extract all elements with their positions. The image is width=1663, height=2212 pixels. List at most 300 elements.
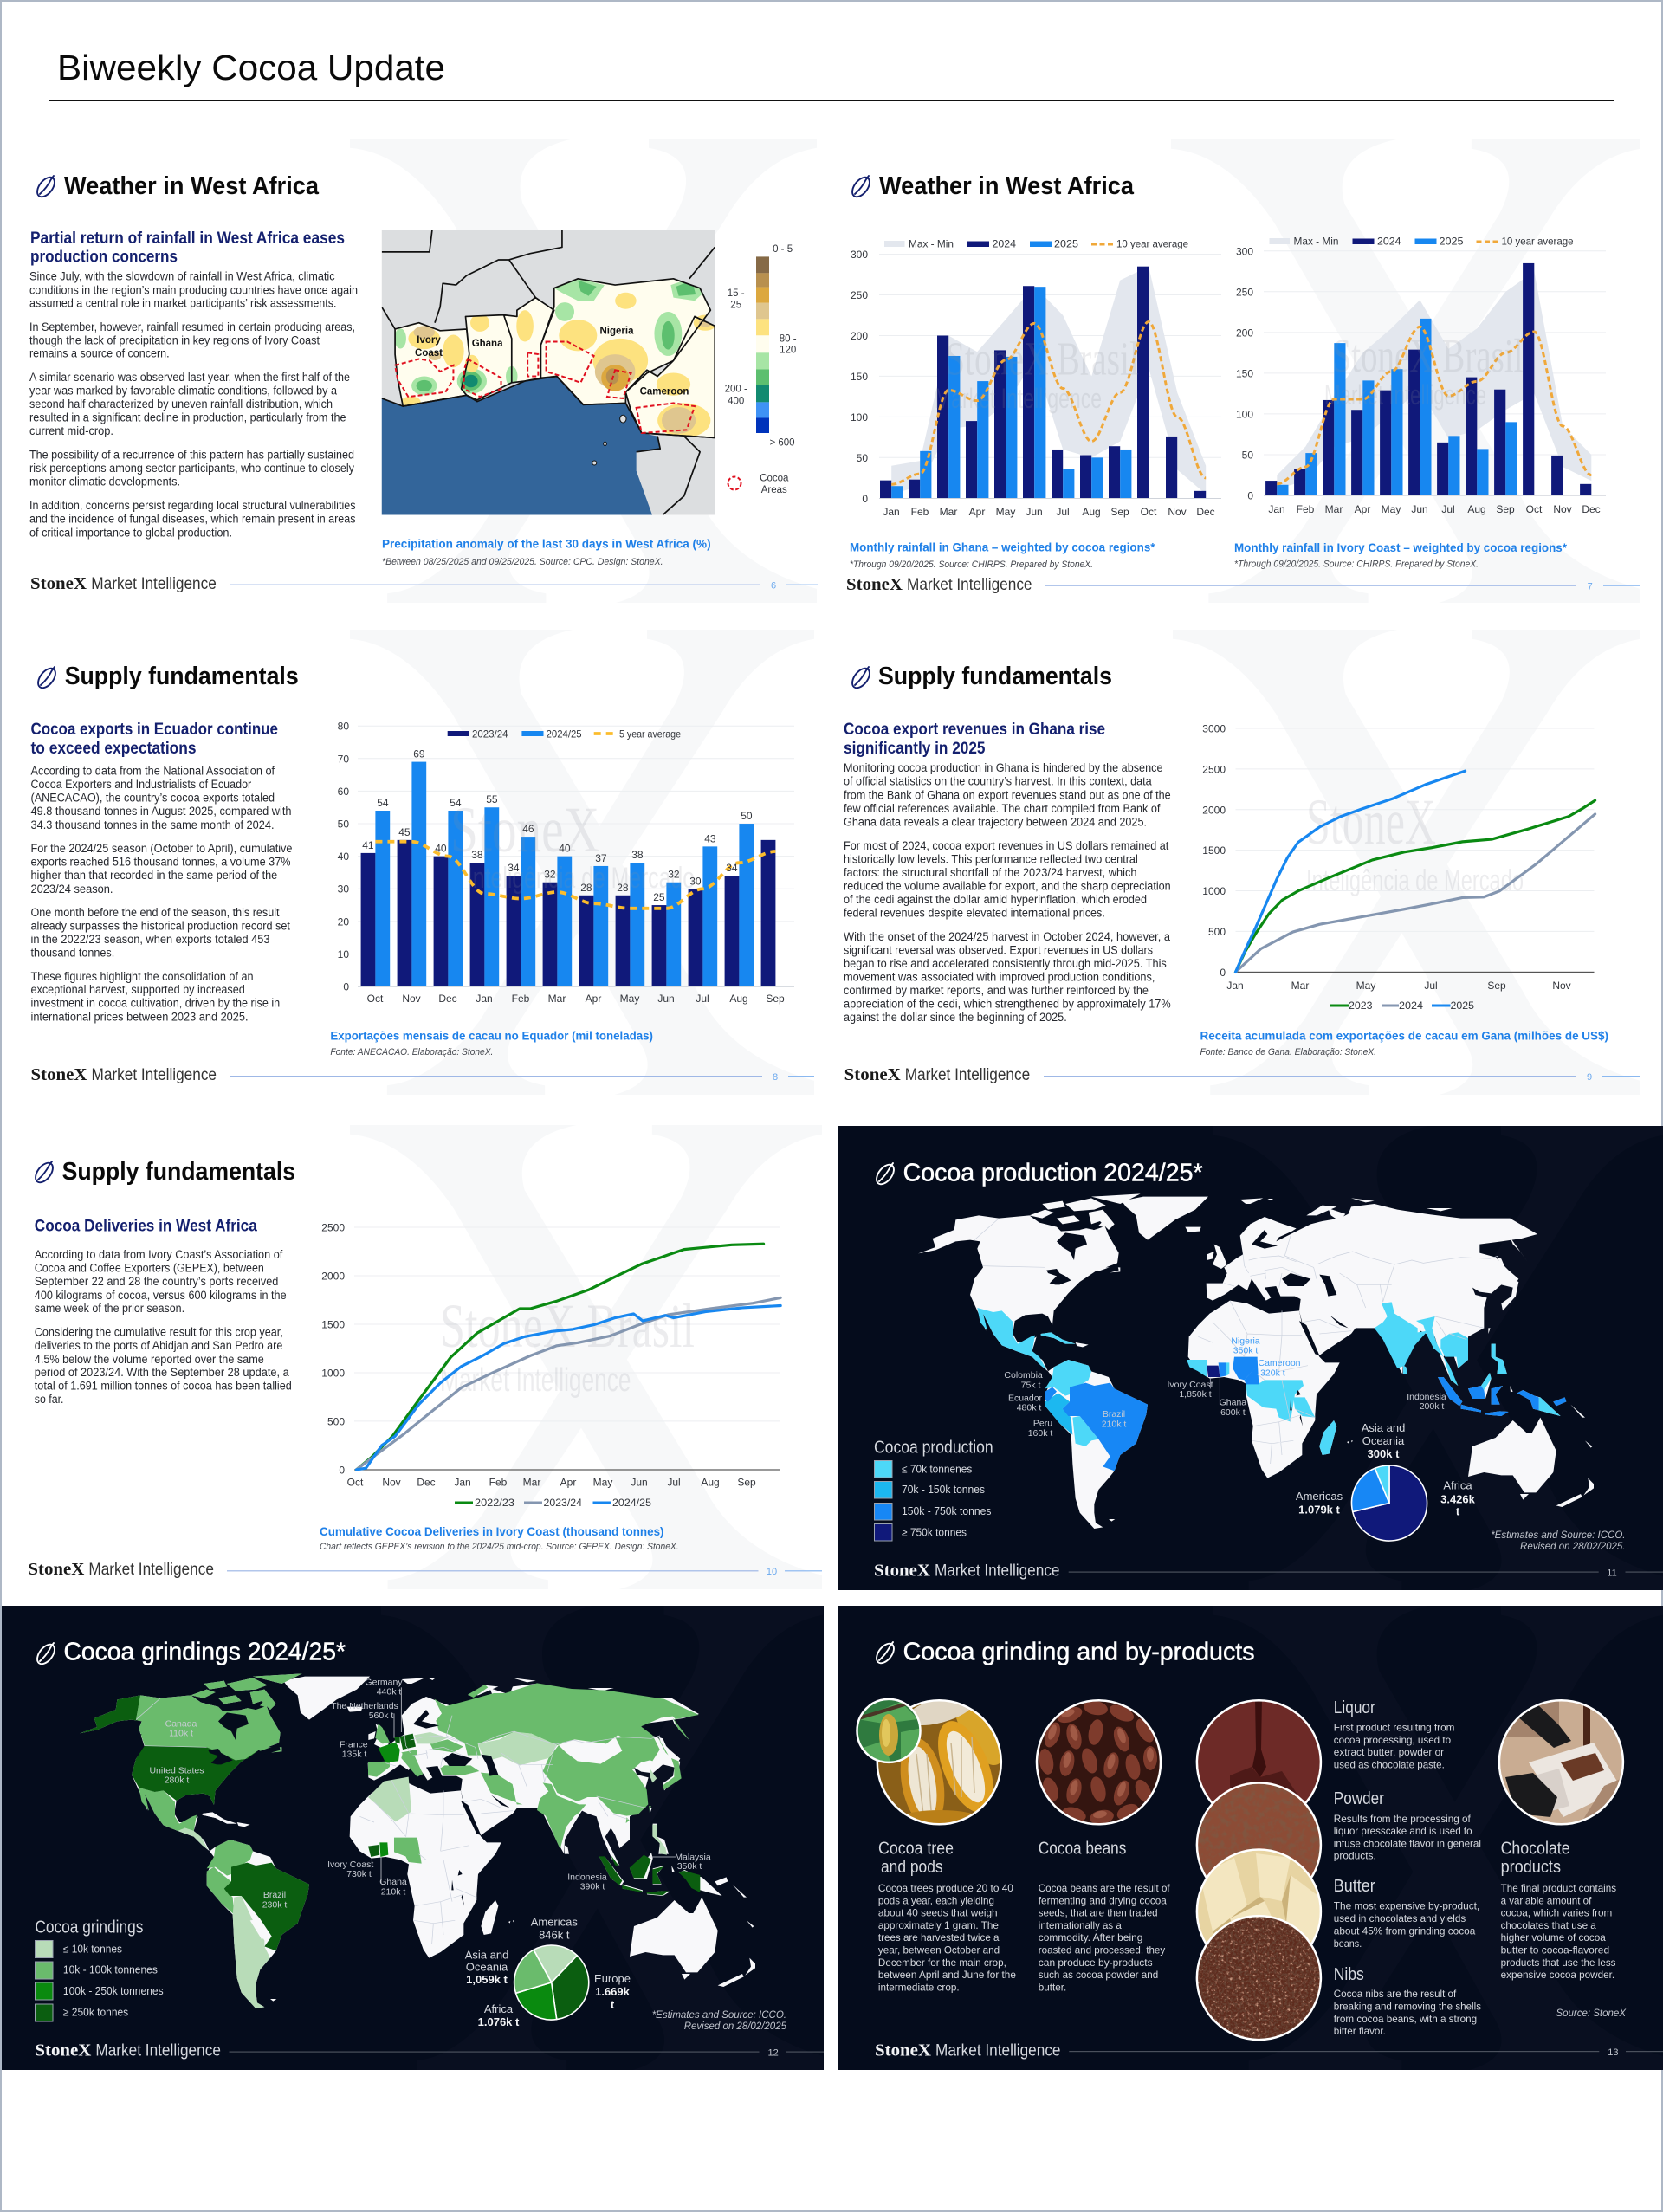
legend: production classes: 70k - 150k tonnes [902,1484,985,1496]
text block: cocoa beans: Cocoa beans [1039,1839,1126,1858]
bar chart: Ecuador monthly exports: Nov [402,993,421,1005]
text block: Ecuador commentary: investment in cocoa cultivation, driven by the rise in [31,997,280,1010]
text block: Ecuador commentary: (ANECACAO), the country’s cocoa exports totaled [31,792,275,804]
text block: Ecuador commentary: 2023/24 season. [31,883,113,896]
text block: liquor: First product resulting from [1334,1721,1454,1733]
line chart: Ghana cumulative export revenues: 2500 [1202,763,1226,775]
bar chart: Ivory Coast monthly rainfall: 150 [1236,367,1253,379]
line chart: cumulative deliveries: StoneX Brasil [440,1291,695,1361]
text block: Ecuador commentary: One month before the end of the season, this result [31,906,280,919]
bar chart: Ghana monthly rainfall: Dec [1196,506,1215,518]
text block: deliveries commentary: deliveries to the ports of Abidjan and San Pedro are [35,1339,282,1352]
legend: precipitation scale: Areas [761,485,787,495]
bar chart: Ivory Coast monthly rainfall [1236,236,1606,515]
bar chart: Ivory Coast monthly rainfall: Market Intelligence [1324,379,1486,411]
legend: precipitation scale [725,244,797,495]
legend [884,237,1188,249]
country labels: 280k t [165,1775,189,1786]
text block: cocoa beans: seeds, that are then traded [1039,1907,1158,1919]
heading: supply fundamentals: Supply fundamentals [62,1158,295,1186]
text block: cocoa beans: such as cocoa powder and [1039,1969,1158,1981]
text block: Ecuador commentary: Cocoa Exporters and Industrialists of Ecuador [31,778,252,791]
bar chart: Ghana monthly rainfall: 300 [851,249,868,261]
footer: brand and page number: StoneX [31,1065,87,1084]
bar chart: Ghana monthly rainfall: Jul [1056,506,1070,518]
text block: Ghana commentary: began to rise and accelerated consistently through mid-2025. This [844,957,1167,970]
bar chart: Ecuador monthly exports: Oct [367,993,384,1005]
legend: grinding classes: 100k - 250k tonnenes [63,1985,164,1997]
text block: cocoa beans [1039,1839,1170,1994]
legend: production classes: ≤ 70k tonnenes [902,1463,972,1475]
heading: cocoa grindings: Cocoa grindings 2024/25* [64,1639,346,1666]
icon: cocoa pod [34,174,58,200]
footer: brand and page number: 7 [1588,582,1593,592]
data labels: 38 [631,849,644,861]
bar chart: Ghana monthly rainfall: May [996,506,1015,518]
country labels: 1,850k t [1179,1389,1212,1400]
icon: cocoa pod [32,1160,56,1186]
text block: Ghana commentary: appreciation of the cedi, which strengthened by approximately 17% [844,998,1171,1011]
text block: Ghana commentary: significantly in 2025 [844,740,986,758]
photo: cocoa pods [856,1698,1003,1826]
text block: chocolate products: products [1501,1858,1561,1877]
text block: rainfall commentary: risk perceptions among sector participants, who continue to closely [29,462,354,475]
legend: 10 year average [1116,237,1188,249]
pie chart: grindings by region: Oceania [466,1961,508,1973]
country labels: United States [149,1765,204,1775]
legend: precipitation scale: Cocoa [760,473,789,483]
source note: Revised on 28/02/2025 [684,2021,787,2032]
legend: precipitation scale: 120 [780,346,796,356]
caption: Precipitation anomaly of the last 30 days in West Africa (%) [382,537,711,551]
text block: Ecuador commentary: According to data from the National Association of [31,764,275,777]
bar chart: Ghana monthly rainfall: 100 [851,411,868,424]
text block: Ghana commentary: from the Bank of Ghana on export revenues stand out as one of the [844,788,1171,801]
photo: chocolate liquor [1195,1699,1322,1803]
text block: rainfall commentary: A similar scenario was observed last year, when the first half of the [29,371,350,384]
country labels: Ivory Coast [327,1860,373,1870]
text block: chocolate products [1501,1839,1616,1981]
map: precipitation anomaly West Africa: Cameroon [640,387,689,398]
legend: 2024 [1377,236,1401,248]
bar chart: Ivory Coast monthly rainfall: Jul [1441,503,1455,515]
text block: cocoa beans: internationally as a [1039,1919,1122,1931]
footer: brand and page number: 12 [767,2047,779,2058]
text block: deliveries commentary: period of 2023/24. With the September 28 update, a [35,1366,289,1379]
footer: brand and page number: 6 [771,580,776,591]
pie chart: grindings by region: 1.076k t [478,2015,520,2028]
footer: brand and page number: Market Intelligence [905,1066,1030,1084]
footer: brand and page number: StoneX [844,1065,901,1084]
bar chart: Ivory Coast monthly rainfall: 300 [1236,246,1253,258]
line chart: Ghana cumulative export revenues: 1000 [1202,885,1226,897]
country labels: Nigeria [1231,1336,1260,1346]
text block: cocoa tree and pods: Cocoa tree [878,1839,954,1858]
text block: butter [1334,1877,1479,1950]
text block: deliveries commentary: September 22 and 28 the country’s ports received [35,1275,278,1288]
pie chart: grindings by region: 846k t [539,1929,570,1942]
text block: rainfall commentary: In September, however, rainfall resumed in certain producing areas, [29,320,355,333]
pie chart: grindings by region: t [611,1998,615,2011]
legend: precipitation scale: 25 [730,301,741,311]
source note: Chart reflects GEPEX’s revision to the 2024/25 mid-crop. Source: GEPEX. Design: StoneX. [320,1542,679,1552]
text block: powder [1334,1789,1481,1861]
footer: brand and page number: Market Intelligence [92,1066,217,1084]
bar chart: Ghana monthly rainfall: 50 [857,452,868,464]
country labels: Indonesia [1407,1392,1446,1402]
data labels: 28 [617,882,629,894]
country labels: 210k t [381,1886,405,1897]
bar chart: Ecuador monthly exports: Jun [657,993,675,1005]
main title: Biweekly Cocoa Update [57,48,445,87]
line chart: Ghana cumulative export revenues: May [1356,980,1375,992]
text block: chocolate products: expensive cocoa powder. [1501,1969,1614,1981]
legend: grinding classes [35,1918,164,2021]
country labels: 135k t [342,1750,366,1760]
footer: brand and page number: Market Intelligence [95,2041,221,2060]
legend: precipitation scale: 200 - [725,385,747,395]
text block: butter: Butter [1334,1877,1375,1896]
legend [1270,236,1574,248]
line chart: Ghana cumulative export revenues: StoneX [1306,786,1436,858]
panel: cocoa production map slide 11 [838,1126,1663,1590]
line chart: Ghana cumulative export revenues: Jul [1424,980,1438,992]
bar chart: Ecuador monthly exports: 40 [338,851,349,863]
text block: rainfall commentary [29,230,358,539]
pie chart: production by region: 3.426k [1440,1493,1476,1505]
text block: Ghana commentary: of the cedi against the dollar amid hyperinflation, which eroded [844,893,1147,906]
text block: cocoa beans: fermenting and drying cocoa [1039,1894,1167,1906]
text block: Ghana commentary: Cocoa export revenues in Ghana rise [844,721,1105,739]
bar chart: Ecuador monthly exports: 20 [338,915,349,928]
footer: brand and page number: StoneX [35,2041,92,2060]
text block: powder: Powder [1334,1789,1384,1808]
country labels: Brazil [263,1890,286,1900]
footer: brand and page number: Market Intelligence [88,1561,214,1579]
text block: Ecuador commentary: These figures highlight the consolidation of an [31,970,253,983]
data labels: 40 [559,843,571,855]
text block: chocolate products: higher volume of cocoa [1501,1931,1606,1944]
line chart: cumulative deliveries: Jul [667,1476,681,1488]
text block: nibs: Cocoa nibs are the result of [1334,1988,1457,2000]
bar chart: Ivory Coast monthly rainfall: Nov [1553,503,1572,515]
bar chart: Ghana monthly rainfall: 0 [862,493,868,505]
data labels: 30 [689,875,702,887]
line chart: cumulative deliveries: Feb [489,1476,508,1488]
data labels: 25 [653,891,665,903]
data labels [362,748,753,903]
line chart: cumulative deliveries: Nov [382,1476,401,1488]
text block: Ghana commentary: Ghana data reveals a clear trajectory between 2024 and 2025. [844,816,1147,829]
text block: deliveries commentary: Considering the cumulative result for this crop year, [35,1325,283,1339]
text block: rainfall commentary: though the lack of precipitation in key regions of Ivory Coast [29,334,320,346]
country labels: Germany [365,1677,403,1687]
text block: chocolate products: Chocolate [1501,1839,1570,1858]
text block: Ecuador commentary: 34.3 thousand tonnes in the same month of 2024. [31,818,274,831]
country labels: 480k t [1017,1403,1041,1413]
bar chart: Ghana monthly rainfall: Feb [911,506,929,518]
bar chart: Ecuador monthly exports: Jan [476,993,493,1005]
text block: nibs: Nibs [1334,1965,1364,1984]
footer: brand and page number [30,574,818,593]
panel: Ivory Coast deliveries slide 10 [28,1125,822,1589]
bar chart: Ghana monthly rainfall: 200 [851,330,868,342]
footer: brand and page number: StoneX [846,575,903,594]
heading: supply fundamentals: Supply fundamentals [65,663,299,690]
country labels: Colombia [1004,1370,1043,1381]
footer: brand and page number: StoneX [30,574,87,593]
text block: chocolate products: cocoa, which varies from [1501,1907,1612,1919]
text block: cocoa beans: Cocoa beans are the result of [1039,1882,1170,1894]
text block: powder: infuse chocolate flavor in general [1334,1837,1481,1849]
legend [1330,999,1474,1012]
text block: cocoa beans: roasted and processed, they [1039,1944,1165,1956]
country labels: The Netherlands [331,1701,398,1711]
photo: cocoa beans [1035,1698,1165,1827]
text block: liquor: used as chocolate paste. [1334,1758,1445,1770]
bar chart: Ghana monthly rainfall: Aug [1082,506,1101,518]
bar chart: Ecuador monthly exports: 80 [338,721,349,733]
text block: rainfall commentary: and the incidence of fungal diseases, which remain present in areas [29,513,356,526]
text block: chocolate products: butter to cocoa-flavored [1501,1944,1609,1956]
country labels: 600k t [1220,1407,1246,1418]
text block: chocolate products: products that use the less [1501,1957,1616,1969]
footer: brand and page number: Market Intelligence [935,1562,1060,1581]
bar chart: Ecuador monthly exports: Apr [586,993,601,1005]
legend: Max - Min [909,237,954,249]
country labels: Malaysia [675,1852,711,1862]
text block: butter: beans. [1334,1937,1362,1950]
text block: cocoa tree and pods: about 40 seeds that weigh [878,1907,998,1919]
text block: rainfall commentary: current mid-crop. [29,424,113,437]
footer: brand and page number [874,1562,1663,1581]
footer: brand and page number: StoneX [28,1560,85,1579]
footer: brand and page number: StoneX [875,2041,932,2060]
pie chart: production by region: Oceania [1362,1434,1405,1447]
source: Ivory Coast: *Through 09/20/2025. Source: CHIRPS. Prepared by StoneX. [1234,559,1479,570]
bar chart: Ecuador monthly exports: Mar [548,993,566,1005]
data labels: 41 [362,839,374,851]
line chart: Ghana cumulative export revenues: 3000 [1202,722,1226,734]
caption: Exportações mensais de cacau no Equador (mil toneladas) [330,1029,653,1043]
bar chart: Ivory Coast monthly rainfall: Jan [1268,503,1285,515]
line chart: cumulative deliveries: 2000 [321,1270,345,1282]
data labels: 45 [398,826,411,838]
text block: nibs: breaking and removing the shells [1334,2001,1481,2013]
text block: Ecuador commentary: 49.8 thousand tonnes in August 2025, compared with [31,805,291,818]
text block: deliveries commentary: so far. [35,1393,64,1406]
legend: precipitation scale: > 600 [769,438,795,449]
country labels [1004,1336,1446,1439]
bar chart: Ivory Coast monthly rainfall: 50 [1242,449,1253,461]
pie chart: production by region: Asia and [1362,1421,1405,1434]
text block: liquor [1334,1698,1454,1770]
line chart: cumulative deliveries: Jun [631,1476,648,1488]
footer: brand and page number [28,1560,822,1579]
legend [455,1497,651,1509]
caption: Receita acumulada com exportações de cacau em Gana (milhões de US$) [1200,1029,1608,1043]
text block: Ecuador commentary: international prices between 2023 and 2025. [31,1010,248,1023]
bar chart: Ghana monthly rainfall: Jan [883,506,900,518]
text block: rainfall commentary: conditions in the region’s main producing countries have once again [29,283,358,296]
text block: Ghana commentary: For most of 2024, cocoa export revenues in US dollars remained at [844,839,1169,852]
pie chart: grindings by region: 1,059k t [466,1973,508,1986]
source note: Source: StoneX [1556,2008,1627,2019]
caption: Cumulative Cocoa Deliveries in Ivory Coast (thousand tonnes) [320,1524,663,1538]
country labels: 75k t [1021,1381,1040,1391]
bar chart: Ecuador monthly exports: 30 [338,883,349,896]
legend: 2025 [1054,237,1078,249]
bar chart: Ecuador monthly exports: 10 [338,948,349,960]
bar chart: Ghana monthly rainfall: Jun [1026,506,1043,518]
bar chart: Ivory Coast monthly rainfall: 0 [1247,490,1253,502]
bar chart: Ivory Coast monthly rainfall: Sep [1496,503,1515,515]
legend: 2024 [993,237,1016,249]
photo: cocoa powder [1195,1782,1322,1879]
text block: cocoa beans: butter. [1039,1982,1066,1994]
line chart: Ghana cumulative export revenues: 0 [1220,967,1226,979]
text block: Ghana commentary: few official references available. The chart compiled from Bank of [844,802,1161,815]
photo: chocolate products [1498,1698,1628,1827]
text block: deliveries commentary: Cocoa Deliveries in West Africa [35,1218,257,1235]
data labels: 46 [522,823,534,835]
line chart: Ghana cumulative export revenues: Sep [1487,980,1506,992]
bar chart: Ghana monthly rainfall: 150 [851,371,868,383]
data labels: 37 [595,852,607,864]
bar chart: Ecuador monthly exports: Inteligência de Mercado [467,862,695,895]
legend: 5 year average [619,728,681,740]
text block: deliveries commentary: Cocoa and Coffee Exporters (GEPEX), between [35,1261,264,1275]
bar chart: Ghana monthly rainfall [851,237,1221,518]
text block: deliveries commentary [35,1218,292,1406]
country labels: 390k t [580,1881,605,1892]
data labels: 32 [544,869,556,881]
text block: Ghana commentary: significant reversal was observed. Export revenues in US dollars [844,943,1153,956]
map: precipitation anomaly West Africa: Ghana [472,339,503,349]
line chart: Ghana cumulative export revenues: Nov [1552,980,1571,992]
text block: rainfall commentary: of critical importance to global production. [29,526,232,539]
panel: rainfall charts slide 7 [846,139,1640,603]
text block: Ghana commentary: confirmed by market reports, and was further reinforced by the [844,984,1149,997]
text block: butter: about 45% from grinding cocoa [1334,1924,1476,1937]
heading: grinding and by-products: Cocoa grinding and by-products [903,1639,1255,1666]
data labels: 50 [741,810,753,822]
text block: rainfall commentary: Partial return of rainfall in West Africa eases [30,230,345,248]
line chart: cumulative deliveries: May [593,1476,612,1488]
bar chart: Ivory Coast monthly rainfall: Oct [1526,503,1543,515]
legend: grinding classes: ≥ 250k tonnes [63,2007,128,2019]
bar chart: Ivory Coast monthly rainfall: Mar [1325,503,1343,515]
ocean [382,377,660,514]
data labels: 34 [508,862,520,874]
photo: cocoa tree [856,1698,922,1763]
source note: Revised on 28/02/2025. [1520,1542,1625,1552]
line chart: Ghana cumulative export revenues: Jan [1226,980,1244,992]
icon: cocoa pod [873,1161,897,1187]
legend: grinding classes: 10k - 100k tonnenes [63,1964,158,1976]
source note: Fonte: Banco de Gana. Elaboração: StoneX. [1200,1047,1376,1057]
legend: precipitation scale: 15 - [728,288,745,299]
bar chart: Ivory Coast monthly rainfall: Aug [1467,503,1486,515]
caption: Ghana: Monthly rainfall in Ghana – weighted by cocoa regions* [850,540,1155,553]
text block: Ghana commentary: against the dollar since the beginning of 2025. [844,1011,1067,1024]
text block: deliveries commentary: 4.5% below the volume reported over the same [35,1353,264,1366]
bar chart: Ecuador monthly exports: Sep [766,993,785,1005]
country labels: 350k t [677,1861,702,1872]
text block: Ghana commentary: With the onset of the 2024/25 harvest in October 2024, however, a [844,930,1170,943]
line chart: cumulative deliveries: 2500 [321,1221,345,1233]
country labels: 110k t [169,1729,193,1739]
text block: rainfall commentary: remains a source of concern. [29,347,170,360]
data labels: 43 [704,832,716,844]
world map: production by country [918,1193,1594,1529]
footer: brand and page number: Market Intelligence [91,575,217,593]
source note [1491,1530,1625,1552]
text block: Ghana commentary: Monitoring cocoa production in Ghana is hindered by the absence [844,761,1162,774]
pie chart: grindings by region: 1.669k [595,1985,631,1998]
text block: cocoa beans: commodity. After being [1039,1931,1142,1944]
legend: 2024 [1399,999,1423,1012]
line chart: cumulative deliveries: 1000 [321,1367,345,1379]
bar chart: Ecuador monthly exports: Jul [696,993,709,1005]
text block: rainfall commentary: monitor climatic developments. [29,475,180,488]
text block: cocoa tree and pods: year, between October and [878,1944,1000,1956]
text block: cocoa tree and pods: and pods [881,1858,943,1877]
data labels: 28 [580,882,592,894]
country labels: Peru [1033,1419,1052,1429]
pie chart: grindings by region: Asia and [465,1948,508,1961]
text block: Ghana commentary: reduced the volume available for export, and the sharp depreciation [844,880,1171,893]
text block: Ecuador commentary [31,721,293,1023]
line chart: cumulative deliveries: Dec [417,1476,436,1488]
legend: 2025 [1450,999,1474,1012]
text block: cocoa tree and pods: December for the main crop, [878,1957,1006,1969]
bar chart: Ivory Coast monthly rainfall: 250 [1236,286,1253,298]
text block: powder: Results from the processing of [1334,1813,1471,1825]
legend: 2025 [1440,236,1464,248]
footer: brand and page number: Market Intelligence [935,2041,1060,2060]
panel: grinding and by-products slide 13 [838,1606,1663,2070]
panel: Ecuador exports slide 8 [31,630,814,1095]
footer: brand and page number: StoneX [874,1562,931,1581]
pie chart: production by region: Americas [1296,1490,1343,1503]
data labels: 55 [486,793,498,805]
legend [448,728,681,740]
icon: cocoa pod [849,174,873,200]
photo: cocoa butter [1195,1848,1322,1945]
country labels: Canada [165,1718,197,1729]
bar chart: Ghana monthly rainfall: 250 [851,289,868,301]
text block: deliveries commentary: According to data from Ivory Coast’s Association of [35,1248,283,1261]
legend: 2023/24 [472,728,508,740]
country labels: 560k t [369,1711,393,1721]
bar chart: Ecuador monthly exports: StoneX [450,794,599,866]
bar chart: Ivory Coast monthly rainfall: Apr [1355,503,1370,515]
legend: 2023 [1349,999,1373,1012]
text block: rainfall commentary: resulted in a significant decline in production, particularly from the [29,411,346,424]
bar chart: Ghana monthly rainfall: Apr [969,506,985,518]
country labels: France [340,1739,368,1750]
country labels: Indonesia [567,1872,607,1883]
country labels: 730k t [346,1869,372,1879]
line chart: cumulative deliveries: Market Intelligence [440,1362,631,1399]
source note [652,2010,787,2032]
country labels: Brazil [1103,1409,1125,1420]
text block: liquor: extract butter, powder or [1334,1746,1444,1758]
text block: deliveries commentary: total of 1.691 million tonnes of cocoa has been tallied [35,1380,292,1393]
footer: brand and page number [844,1065,1640,1084]
text block: Ghana commentary: factors: the structural shortfall of the 2023/24 harvest, which [844,866,1136,879]
